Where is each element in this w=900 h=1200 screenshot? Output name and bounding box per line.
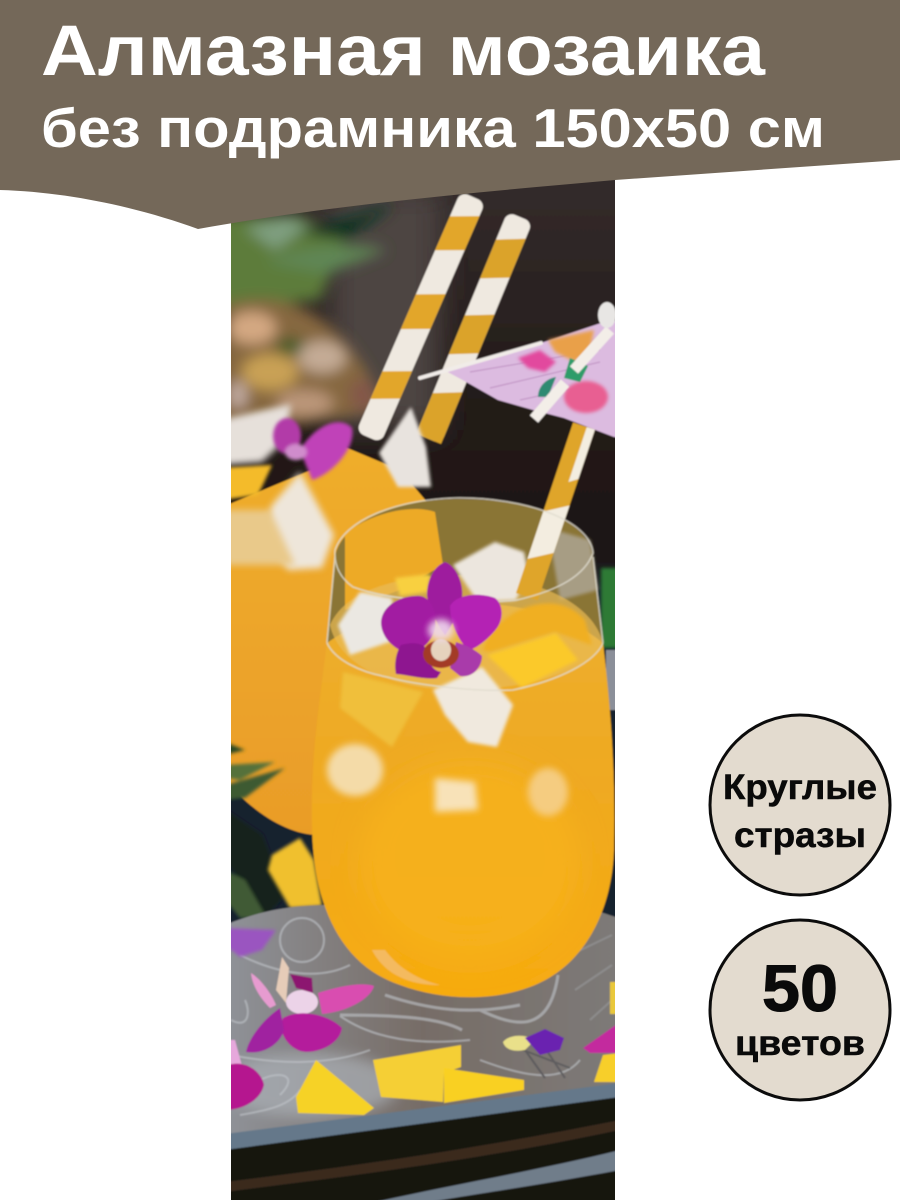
header banner <box>0 0 900 229</box>
pineapple chunk right <box>487 633 578 688</box>
subtitle: без подрамника 150х50 см <box>41 97 825 159</box>
umbrella rib <box>420 343 541 378</box>
pink flower right <box>564 381 608 413</box>
title: Алмазная мозаика <box>41 12 766 91</box>
badge: round rhinestones <box>710 715 890 895</box>
blurred pineapple chunk <box>268 838 322 908</box>
pineapple chunk left <box>340 672 423 747</box>
umbrella pleats <box>470 350 600 400</box>
back orchid <box>273 418 352 480</box>
lower right petal <box>450 642 482 676</box>
back glass <box>231 400 434 836</box>
orchid centre <box>423 640 459 668</box>
bottom glass sheen <box>372 950 440 985</box>
umbrella spine <box>534 330 610 419</box>
pineapple chunk tray 2 <box>373 1045 461 1102</box>
back glass ice top <box>220 404 291 465</box>
tray rim <box>225 1083 620 1150</box>
white centre <box>286 990 318 1014</box>
back glass juice <box>231 447 426 836</box>
orange flower <box>548 330 594 362</box>
upper sepal <box>276 957 289 1003</box>
badge circle <box>710 715 890 895</box>
tray back strip right <box>604 648 615 712</box>
badge circle <box>710 920 890 1100</box>
brown streak <box>225 1120 620 1192</box>
pineapple behind <box>483 603 592 652</box>
lower left petal <box>395 643 441 678</box>
pineapple sliver <box>610 982 620 1014</box>
pale petal <box>225 1040 242 1066</box>
background haze <box>330 190 440 430</box>
left sepal <box>251 973 276 1008</box>
tray brightness <box>220 1053 400 1117</box>
pineapple chunk tray 3 <box>444 1068 524 1103</box>
teal leaf <box>538 377 556 397</box>
badge number: 50 <box>762 951 838 1025</box>
glass outline <box>327 498 603 690</box>
back glass highlight <box>379 407 431 487</box>
glass rim and back wall <box>327 499 603 643</box>
magenta petal large <box>281 1013 342 1052</box>
violet flower <box>525 1029 564 1055</box>
tray lower dark <box>225 1097 620 1200</box>
tray engraving <box>231 918 612 1115</box>
ice cube front <box>433 667 513 747</box>
right translucent part <box>548 528 598 600</box>
badge text line 2: стразы <box>734 816 866 855</box>
juice surface <box>330 575 602 690</box>
main glass <box>312 422 614 997</box>
orchid throat <box>431 639 451 661</box>
pineapple chunk tray 4 <box>594 1053 620 1082</box>
badge label: цветов <box>735 1024 865 1063</box>
straw 2 <box>416 212 532 444</box>
canopy <box>444 320 620 437</box>
green square <box>564 358 588 382</box>
pink flower <box>518 350 556 372</box>
magenta petal left <box>246 1008 284 1053</box>
lip <box>290 974 313 993</box>
pineapple top <box>395 574 430 596</box>
top petal <box>427 562 462 635</box>
left edge orchid <box>225 1040 264 1110</box>
green patch right <box>598 566 615 650</box>
tray orchid <box>246 957 374 1053</box>
badge text line 1: Круглые <box>723 768 877 807</box>
left petal <box>381 596 435 652</box>
umbrella tip <box>598 302 616 328</box>
juice body <box>312 603 614 997</box>
magenta petal <box>225 1064 264 1110</box>
orchid glow <box>428 619 454 641</box>
tray surface <box>225 905 620 1140</box>
badge: 50 colours <box>710 920 890 1100</box>
dark background <box>231 180 615 1150</box>
back glass seen through <box>345 509 443 610</box>
ice cube left <box>338 592 395 655</box>
tray petal upper left <box>225 928 276 957</box>
submerged ice <box>327 744 568 816</box>
small violet petal <box>503 1029 564 1055</box>
tray <box>220 905 620 1200</box>
yellow petal <box>503 1036 535 1051</box>
photo: tropical cocktails <box>231 180 615 1200</box>
orchid on glass <box>381 562 502 678</box>
back glass fruit <box>222 465 272 500</box>
pink petal right <box>318 984 374 1014</box>
juice glow <box>388 943 552 983</box>
pineapple chunk tray 1 <box>296 1060 374 1115</box>
straw 3 <box>516 422 595 600</box>
back glass ice <box>262 472 334 570</box>
back glass tone <box>225 510 295 565</box>
straw 1 <box>356 192 485 443</box>
blurred pineapple <box>215 204 396 430</box>
right petal <box>450 595 502 650</box>
umbrella <box>420 302 620 437</box>
ice cube top <box>453 542 528 602</box>
lower rim <box>375 1150 620 1200</box>
right edge petal <box>583 1022 620 1053</box>
lower left pineapple leaves <box>225 742 285 920</box>
